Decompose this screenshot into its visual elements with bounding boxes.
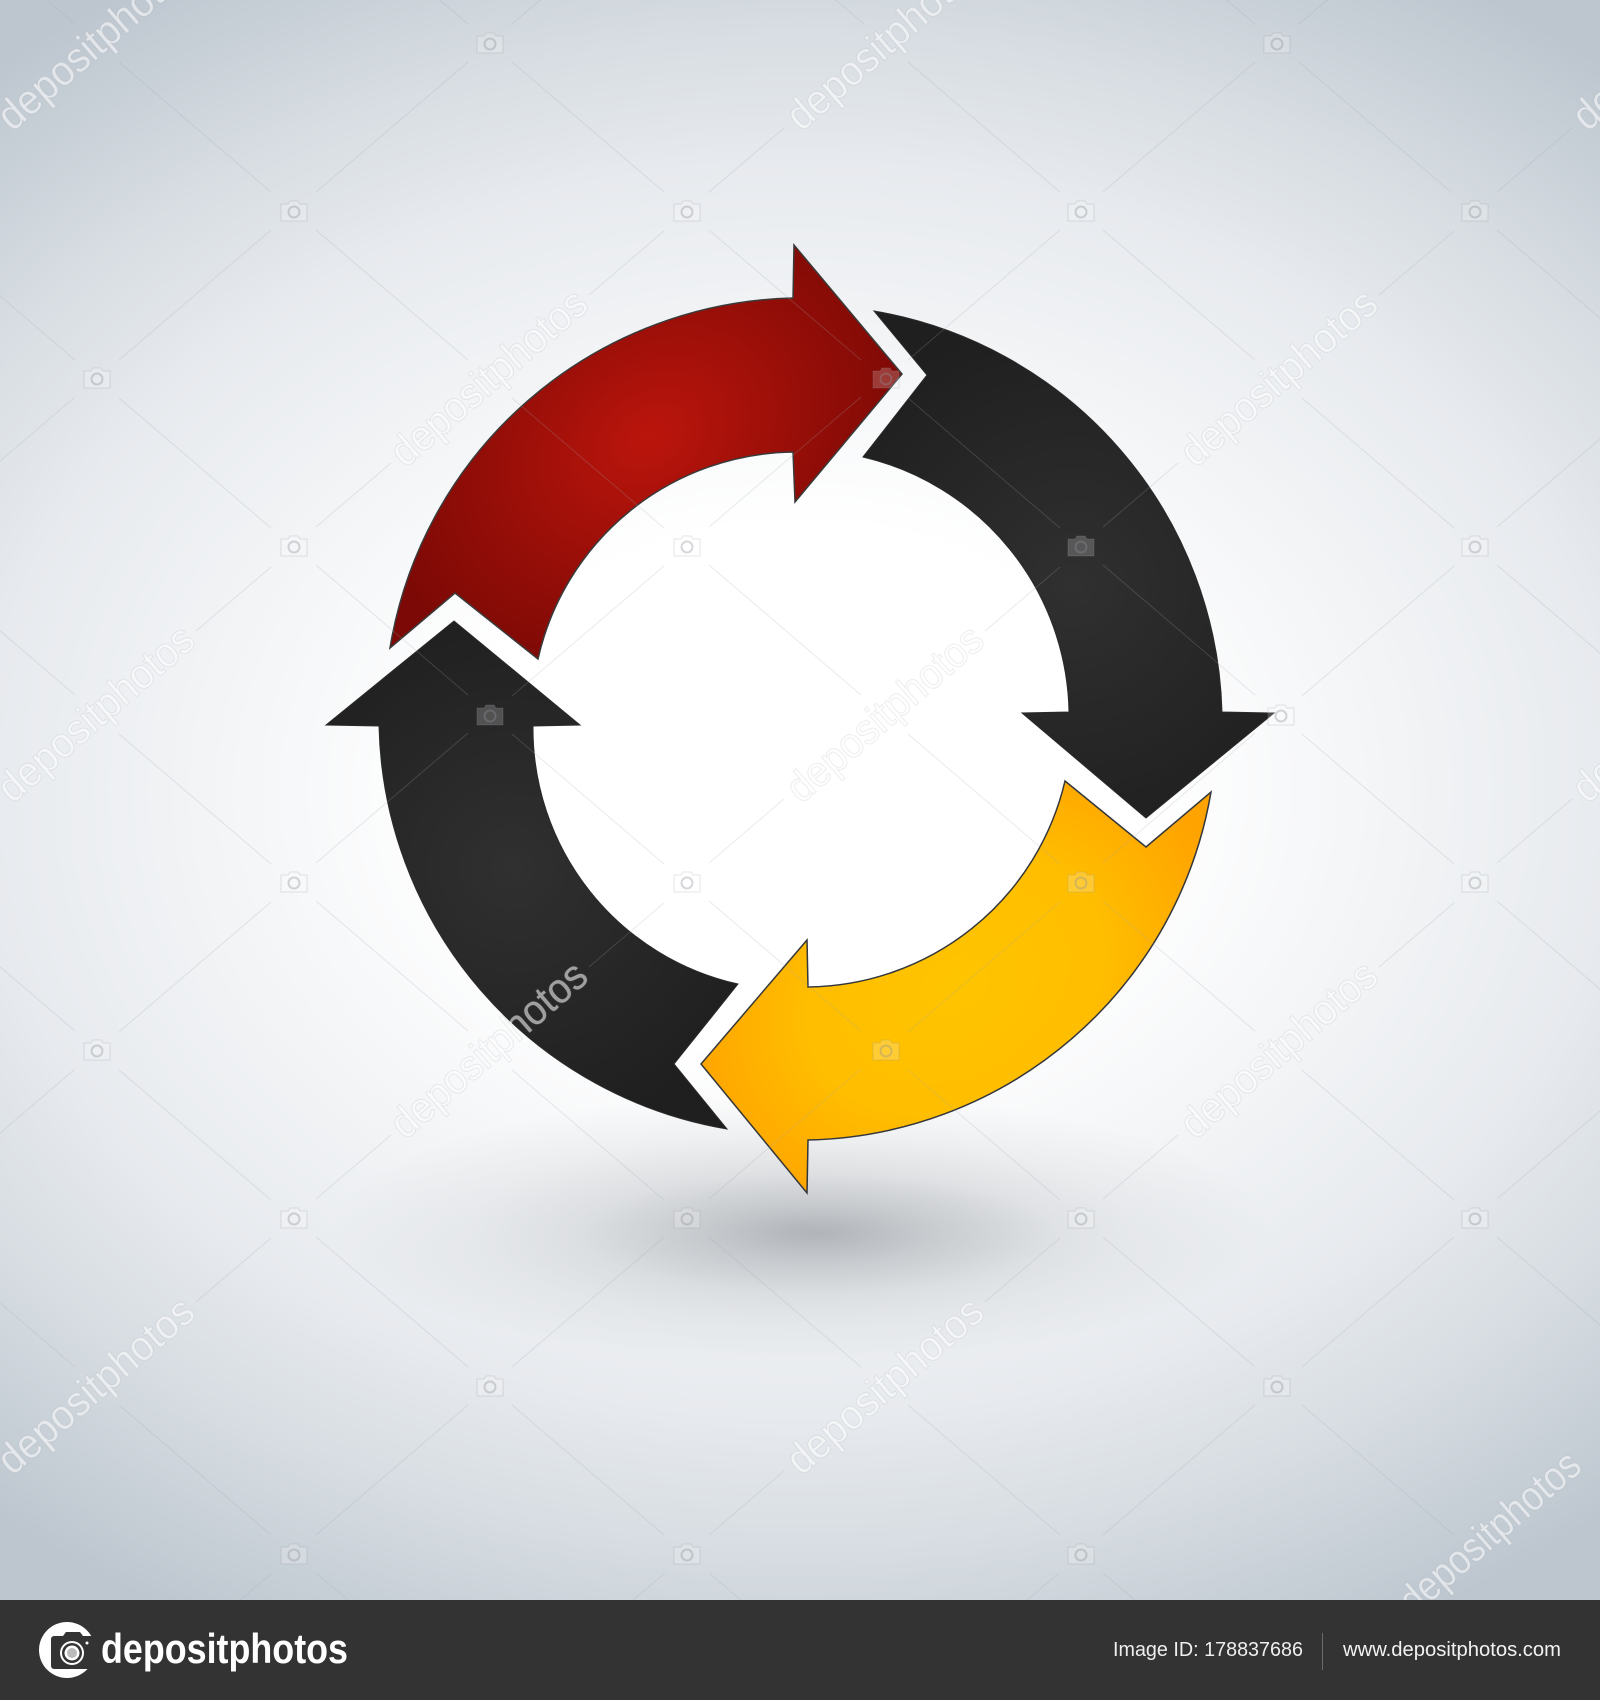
watermark text: depositphotos bbox=[380, 951, 596, 1147]
watermark text: depositphotos bbox=[380, 279, 596, 475]
watermark text: depositphotos bbox=[1170, 279, 1386, 475]
website url: www.depositphotos.com bbox=[1342, 1639, 1561, 1661]
watermark text: depositphotos bbox=[776, 1287, 992, 1483]
watermark camera icons bbox=[84, 33, 1488, 1564]
footer bar bbox=[0, 1600, 1600, 1700]
watermark text: depositphotos bbox=[776, 615, 992, 811]
arrow: dark bottom-left bbox=[326, 621, 738, 1129]
arrow: yellow bottom-right bbox=[701, 781, 1211, 1193]
icon: depositphotos camera logo bbox=[39, 1622, 95, 1678]
watermark text: depositphotos bbox=[1170, 951, 1386, 1147]
arrow: dark top-right bbox=[863, 311, 1274, 818]
circular arrow cycle bbox=[326, 245, 1274, 1193]
logo wordmark: depositphotos bbox=[101, 1625, 348, 1672]
image id: Image ID: 178837686 bbox=[1113, 1639, 1303, 1661]
arrow: red top-left bbox=[390, 245, 902, 659]
drop shadow under ring bbox=[330, 1093, 1270, 1363]
